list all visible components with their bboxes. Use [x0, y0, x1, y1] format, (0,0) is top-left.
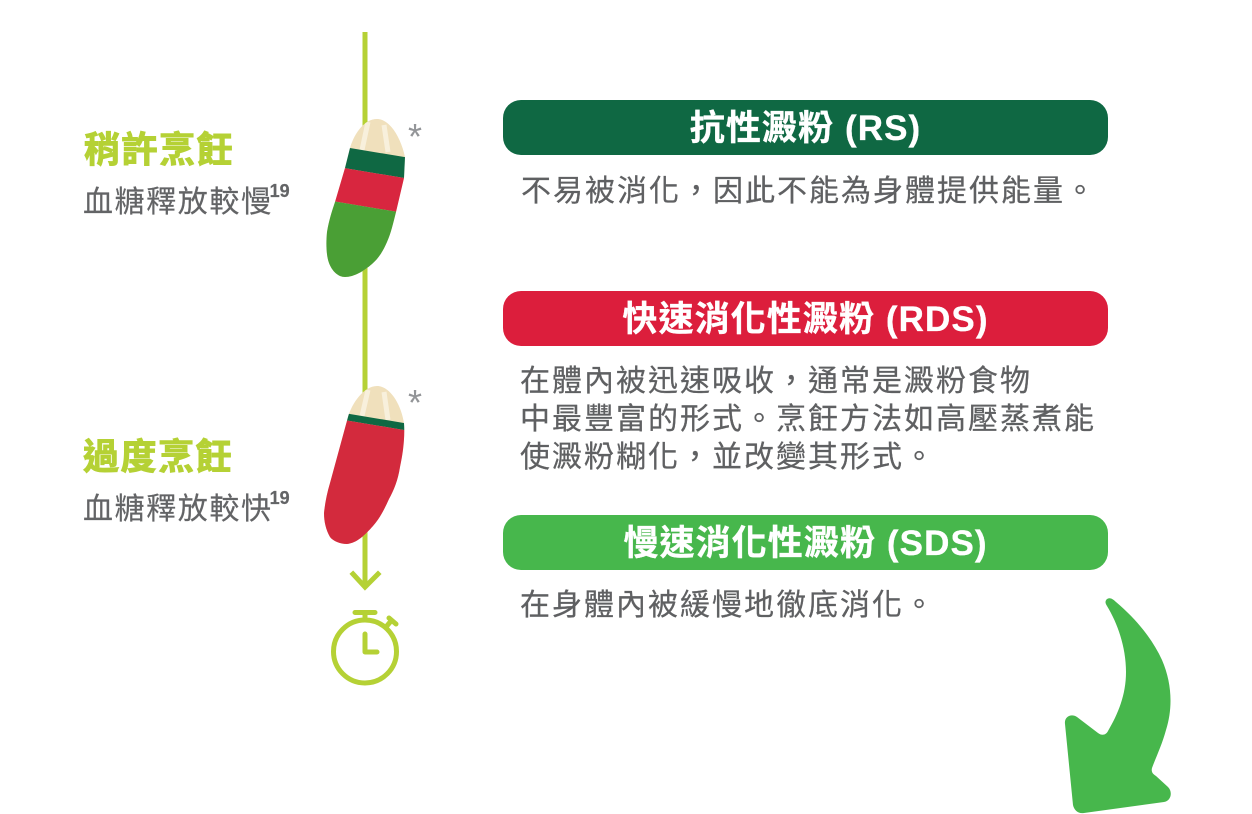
icon: rice grain, lightly cooked	[326, 119, 405, 277]
text: rapidly digestible starch description: 使澱粉糊化，並改變其形式。	[520, 441, 936, 474]
heading: overcooked: 過度烹飪	[83, 436, 233, 477]
text: rapidly digestible starch description: 在體內被迅速吸收，通常是澱粉食物	[520, 365, 1032, 398]
text: resistant starch description: 不易被消化，因此不能為身體提供能量。	[521, 175, 1097, 208]
panel heading: rapidly digestible starch	[503, 291, 1108, 346]
panel heading: resistant starch: 抗性澱粉 (RS)	[690, 109, 921, 148]
icon: rice grain, overcooked	[324, 386, 404, 544]
heading: lightly cooked: 稍許烹飪	[84, 129, 234, 170]
asterisk mark 1: *	[408, 116, 422, 157]
asterisk mark 2: *	[408, 382, 422, 423]
panel heading: slowly digestible starch	[503, 515, 1108, 570]
text: slower glucose release: 血糖釋放較慢19	[83, 181, 290, 219]
text: faster glucose release: 血糖釋放較快19	[83, 488, 290, 526]
text: slowly digestible starch description: 在身體內被緩慢地徹底消化。	[520, 589, 936, 622]
panel heading: slowly digestible starch: 慢速消化性澱粉 (SDS)	[623, 524, 988, 563]
icon: large green curved arrow	[1065, 598, 1171, 813]
timeline axis with arrow	[353, 32, 378, 587]
timeline graphic	[324, 32, 1171, 814]
panel heading: rapidly digestible starch: 快速消化性澱粉 (RDS)	[622, 300, 989, 339]
text: rapidly digestible starch description: 中最豐富的形式。烹飪方法如高壓蒸煮能	[520, 403, 1096, 436]
icon: stopwatch	[334, 612, 396, 683]
panel heading: resistant starch	[503, 100, 1108, 155]
text: rapidly digestible starch description	[520, 365, 1096, 474]
